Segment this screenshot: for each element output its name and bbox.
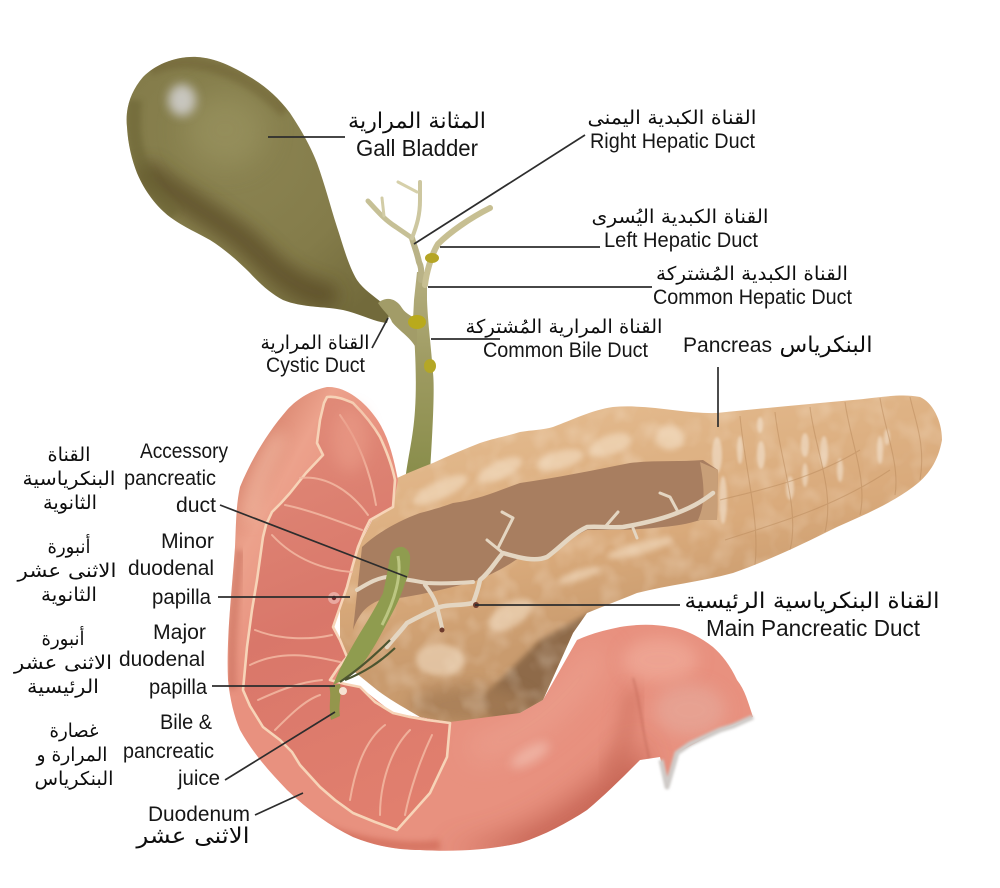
major papilla and juice <box>329 684 341 720</box>
English labels <box>119 130 921 826</box>
Arabic labels: القناة المرارية المُشتركة <box>466 316 662 338</box>
Arabic labels: القناة المرارية <box>260 332 370 354</box>
Arabic labels: البنكرياسية <box>22 468 116 490</box>
Arabic labels: البنكرياس <box>34 768 114 790</box>
English labels: duodenal <box>119 648 205 671</box>
English labels: Accessory <box>140 440 228 463</box>
Arabic labels: الاثنى عشر <box>13 652 112 674</box>
English labels: duct <box>176 494 216 517</box>
bile duct inside pancreas <box>328 547 410 720</box>
Arabic labels: القناة <box>48 444 90 466</box>
English labels: Duodenum <box>148 803 250 826</box>
English labels: Gall Bladder <box>356 135 478 161</box>
intestine end rim <box>661 717 753 787</box>
English labels: papilla <box>152 586 211 609</box>
accessory pancreatic duct <box>357 577 473 590</box>
Arabic labels: أنبورة <box>48 534 90 558</box>
leader lines <box>212 135 718 815</box>
English labels: pancreatic <box>123 740 214 763</box>
ribs on the pancreas tail <box>712 417 890 524</box>
cystic duct <box>378 299 417 350</box>
interior folds <box>250 415 432 815</box>
minor papilla <box>328 592 340 604</box>
Arabic labels: المرارة و <box>36 744 108 766</box>
English labels: Bile & <box>160 711 212 734</box>
bile duct tree <box>368 182 490 482</box>
small intestine and duodenum <box>228 387 753 860</box>
English labels: Left Hepatic Duct <box>604 229 758 252</box>
Arabic labels: الاثنى عشر <box>16 560 116 582</box>
Arabic labels: الثانوية <box>41 584 97 606</box>
main pancreatic duct <box>357 493 713 647</box>
English labels: Common Bile Duct <box>483 339 648 362</box>
English labels: pancreatic <box>124 467 216 490</box>
Arabic labels: غصارة <box>50 720 99 742</box>
English labels: Major <box>153 621 206 644</box>
cut section of pancreas <box>353 460 718 630</box>
pale lobule highlights on the neck <box>409 426 684 676</box>
English labels: Cystic Duct <box>266 354 365 377</box>
duodenum interior <box>243 397 450 830</box>
Arabic labels: الرئيسية <box>27 676 99 698</box>
Arabic labels: القناة الكبدية اليُسرى <box>592 206 768 228</box>
hepatic ducts <box>368 182 490 285</box>
jejunum shading <box>466 742 654 850</box>
Arabic labels: القناة الكبدية المُشتركة <box>656 263 848 285</box>
Arabic labels: الاثنى عشر <box>135 824 250 849</box>
English labels: Right Hepatic Duct <box>590 130 755 153</box>
English labels: Pancreas <box>683 334 772 357</box>
English labels: papilla <box>149 676 207 699</box>
Arabic labels <box>13 107 939 849</box>
gall bladder <box>127 57 390 323</box>
English labels: Minor <box>161 530 214 553</box>
interior shading <box>332 408 368 472</box>
Arabic labels: أنبورة <box>42 626 84 650</box>
English labels: duodenal <box>128 557 214 580</box>
shaded underside of pancreas <box>484 610 593 716</box>
common bile duct <box>405 272 434 482</box>
Arabic labels: القناة الكبدية اليمنى <box>588 107 756 129</box>
Arabic labels: المثانة المرارية <box>348 109 486 134</box>
English labels: juice <box>177 767 220 790</box>
Arabic labels: البنكرياس <box>780 333 872 358</box>
Arabic labels: الثانوية <box>43 492 97 514</box>
English labels: Main Pancreatic Duct <box>706 615 921 641</box>
yellow duct markers <box>425 253 439 263</box>
Arabic labels: القناة البنكرياسية الرئيسية <box>684 589 940 614</box>
English labels: Common Hepatic Duct <box>653 286 852 309</box>
pancreas <box>340 390 950 730</box>
